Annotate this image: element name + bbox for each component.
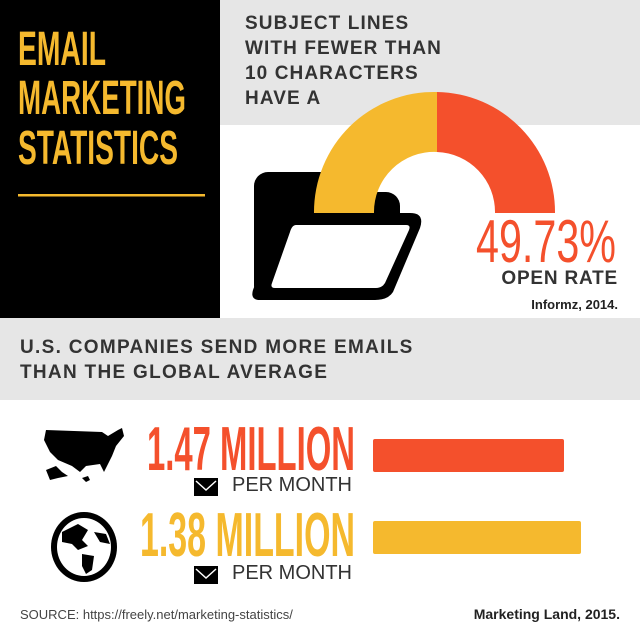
bar: US: [373, 439, 564, 472]
label: per month 1: PER MONTH: [232, 474, 352, 496]
panel: title block: [0, 0, 220, 318]
heading: subject lines: [245, 13, 442, 109]
source: marketing land: Marketing Land, 2015.: [474, 606, 620, 622]
icon: globe: [51, 512, 117, 582]
gauge yellow: [314, 92, 437, 213]
heading: US companies: [20, 337, 414, 383]
label: per month 2: PER MONTH: [232, 562, 352, 584]
icon: US map: [44, 428, 124, 482]
label: open rate: OPEN RATE: [501, 268, 618, 289]
heading: subject lines: WITH FEWER THAN: [245, 38, 442, 59]
title: EMAIL: [18, 23, 106, 76]
source: informz: Informz, 2014.: [531, 297, 618, 312]
bar: global: [373, 521, 581, 554]
heading: US companies: U.S. COMPANIES SEND MORE EMAILS: [20, 337, 414, 358]
heading: subject lines: SUBJECT LINES: [245, 13, 409, 34]
gauge red: [437, 92, 555, 213]
grey section band: [0, 318, 640, 400]
heading: US companies: THAN THE GLOBAL AVERAGE: [20, 362, 328, 383]
heading: subject lines: 10 CHARACTERS: [245, 63, 419, 84]
heading: subject lines: HAVE A: [245, 88, 321, 109]
icon: folder: [252, 172, 421, 300]
title: [18, 23, 205, 196]
grey top band: [220, 0, 640, 125]
chart: half donut gauge with folder: [252, 92, 616, 300]
source text: SOURCE: https://freely.net/marketing-statistics/: [20, 607, 293, 622]
